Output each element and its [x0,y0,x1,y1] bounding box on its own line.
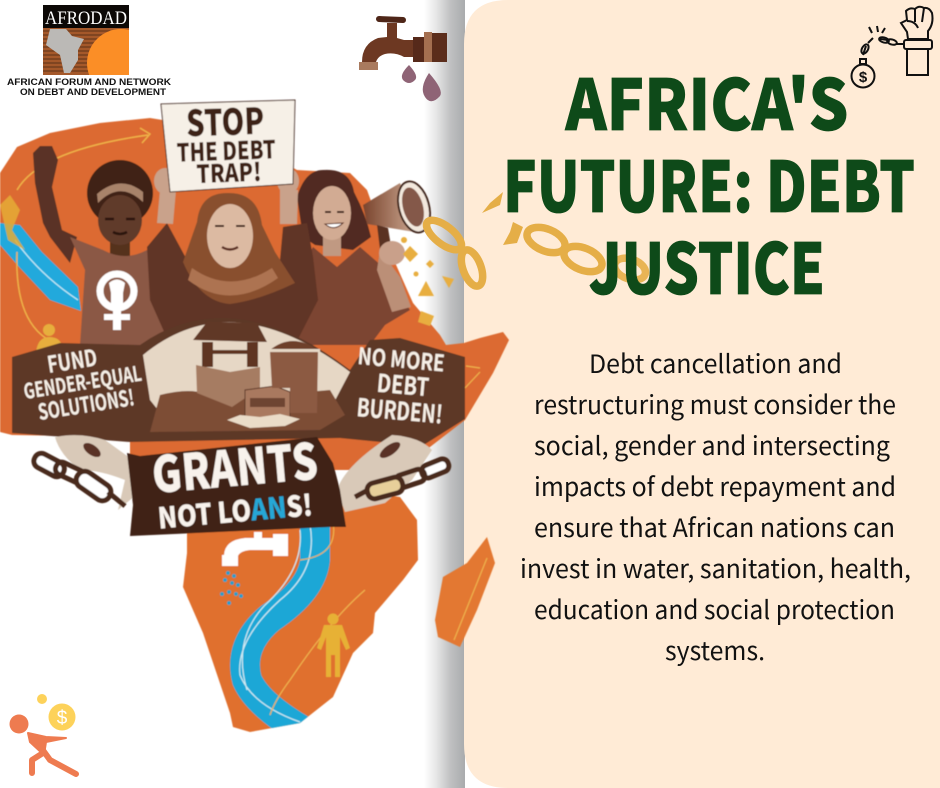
banner text: no more debt burden: DEBT [376,364,431,404]
body text: education and social protection [534,590,895,627]
river south [240,500,365,732]
background shadow beside panel [424,0,465,788]
logo mark [43,5,129,75]
body text: social, gender and intersecting [534,426,891,463]
map: yellow person [317,614,350,677]
woman right [283,170,435,345]
protest sign: STOP [185,93,265,147]
map: horn arrow detail [465,366,480,388]
logo caption [7,77,171,98]
map: southern Africa [183,490,418,732]
map: white tap [222,532,288,566]
icon: fist breaking chain with money ball [852,7,932,87]
left broken chain [31,435,136,510]
water tank [268,341,320,413]
logo mark: AFRODAD [45,9,127,29]
heading: JUSTICE [589,214,825,315]
dome with well and water tank [143,322,350,432]
grants not loans banner: GRANTS [149,422,320,508]
protest sign: TRAP! [196,153,262,191]
logo caption: AFRICAN FORUM AND NETWORK [7,77,171,88]
banner text: fund gender-equal solutions: FUND [44,339,99,380]
icon: broken gold chain [422,192,648,289]
body text: restructuring must consider the [534,385,896,422]
droplets [402,65,441,101]
megaphone [363,178,435,265]
small yellow person [36,324,62,352]
foliage [150,390,345,432]
small coin [37,694,47,704]
map: water drips [220,571,243,605]
banner text: fund gender-equal solutions: GENDER-EQUAL [21,358,144,406]
banner text: no more debt burden: BURDEN! [355,388,444,432]
map: northern Africa [0,118,509,470]
grants not loans banner: NOT LOANS! [156,482,314,538]
feminist fist symbol [100,274,134,330]
well [193,322,290,418]
illustration: Africa map with protest scene [0,92,509,732]
heading: AFRICA'S [565,50,848,151]
ribbon banner [12,318,465,446]
logo caption: ON DEBT AND DEVELOPMENT [20,87,166,98]
gold debris [401,237,454,326]
grants not loans banner [127,422,346,538]
icon: leaking tap [359,19,447,101]
icon: person chasing coin [10,694,76,774]
body text: ensure that African nations can [534,508,895,545]
map: Madagascar [435,537,495,647]
woman left [33,146,167,345]
dollar coin: $ [57,708,68,729]
body text [520,344,911,668]
panel: text background [464,0,940,788]
protest sign [161,92,295,192]
banner text: no more debt burden [352,337,449,432]
logo: AFRODAD [7,5,171,98]
river north [0,128,150,345]
body text: invest in water, sanitation, health, [520,549,911,586]
icon: fist breaking chain with money ball: $ [859,69,868,86]
protest sign: THE DEBT [176,130,276,170]
body text: Debt cancellation and [589,344,842,381]
banner text: fund gender-equal solutions [17,332,147,429]
banner text: no more debt burden: NO MORE [357,337,446,379]
heading [503,50,915,315]
woman centre [147,168,318,345]
banner text: fund gender-equal solutions: SOLUTIONS! [36,380,136,427]
spiky ground [227,414,300,428]
right broken chain [337,435,451,512]
body text: systems. [665,631,765,668]
body text: impacts of debt repayment and [534,467,896,504]
runner [10,714,76,774]
